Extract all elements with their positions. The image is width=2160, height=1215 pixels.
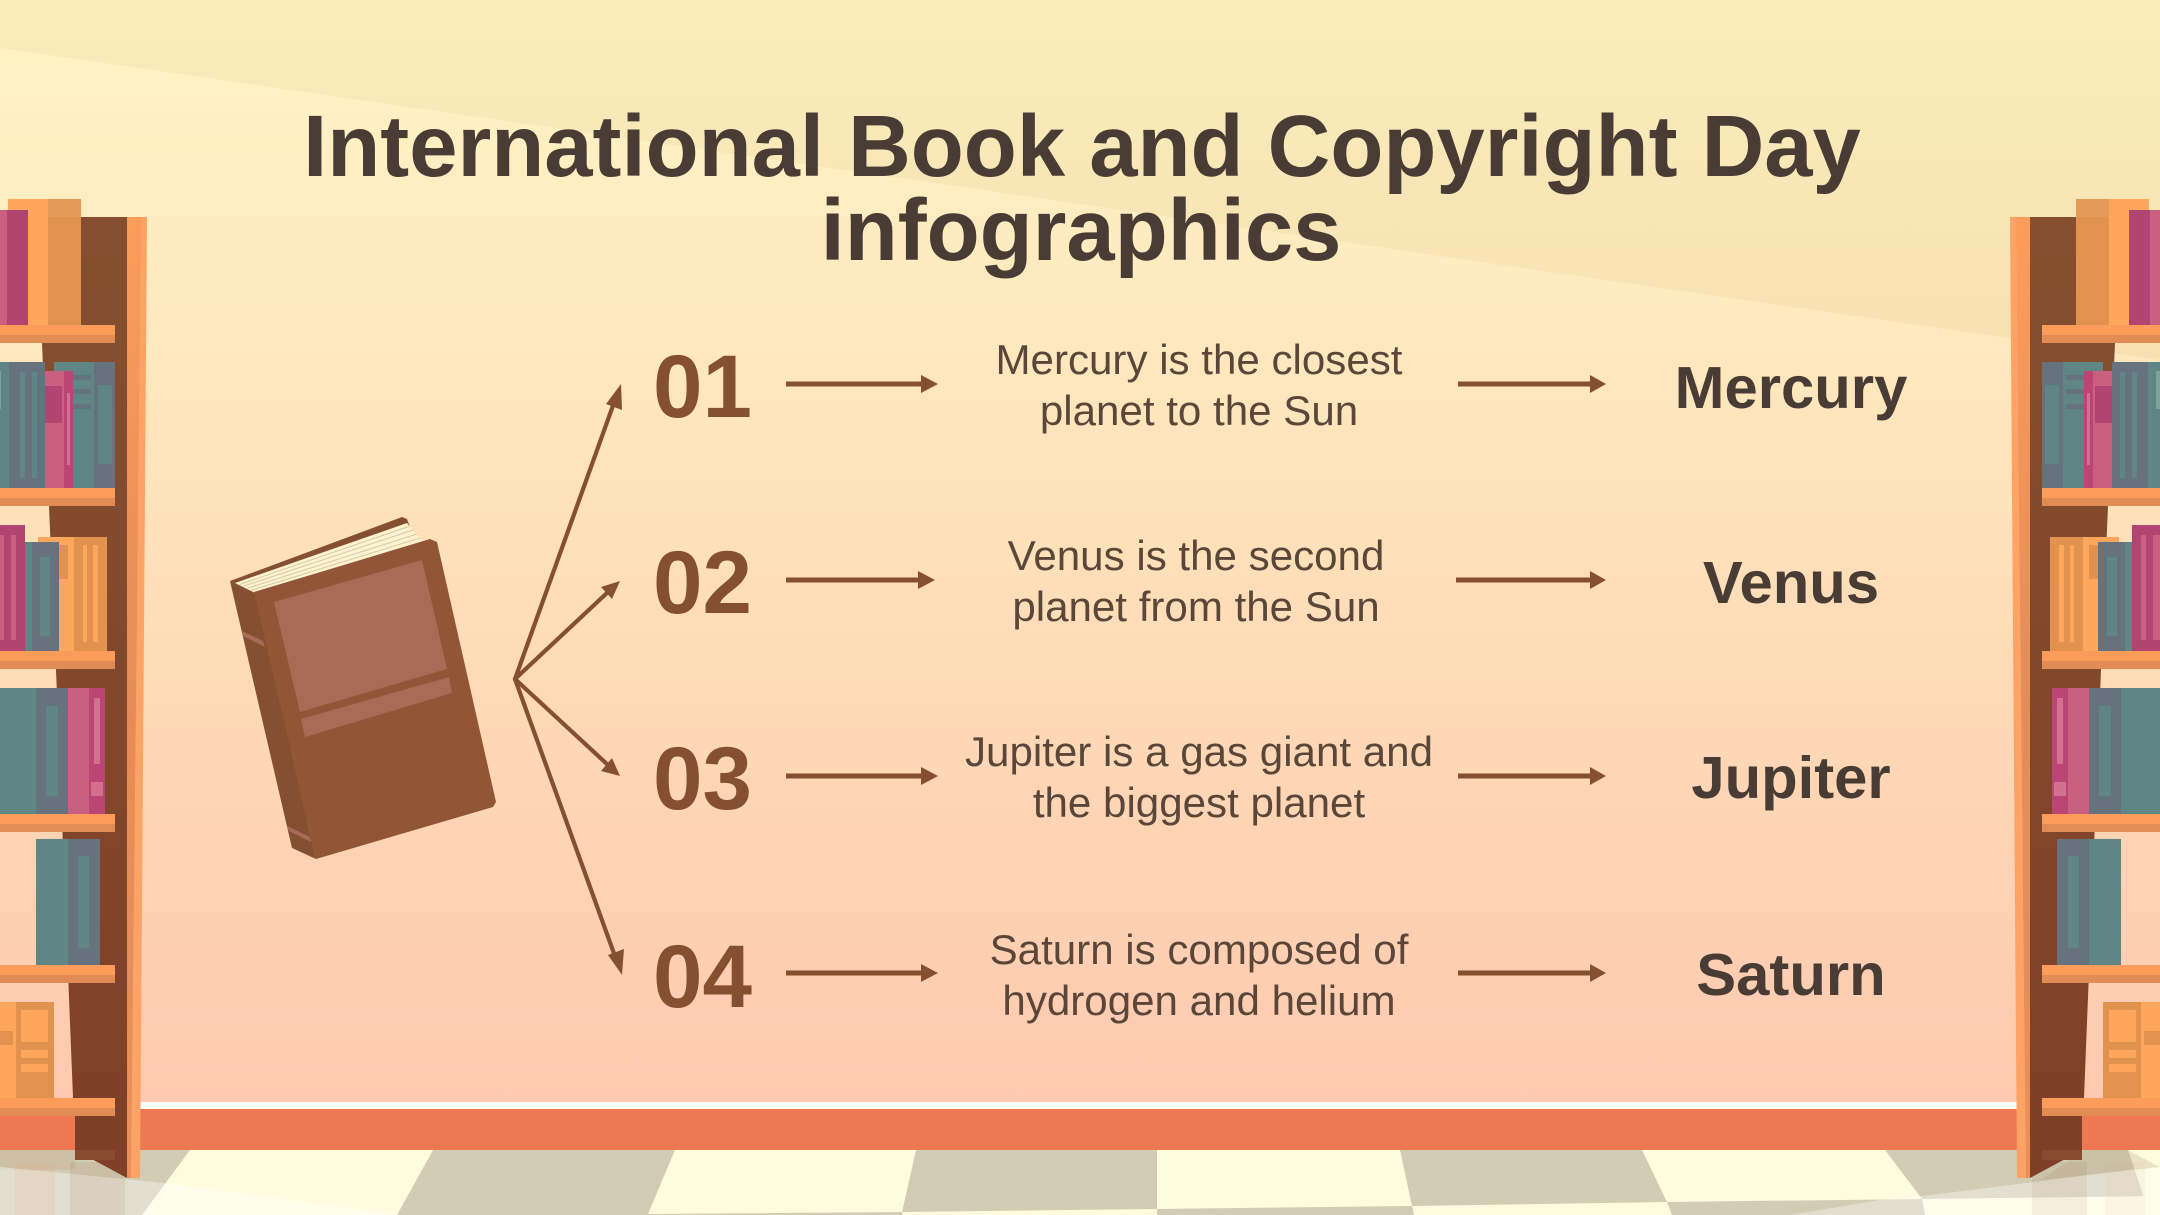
left bookcase	[0, 199, 147, 1178]
description: planet to the Sun	[1040, 387, 1358, 434]
description: planet from the Sun	[1012, 583, 1380, 630]
title	[303, 98, 1861, 279]
name: Venus	[1703, 549, 1879, 616]
number 01: 01	[653, 336, 752, 436]
title: infographics	[821, 182, 1341, 279]
arrow	[1458, 767, 1606, 785]
description	[965, 728, 1433, 826]
description	[1008, 532, 1384, 630]
row 02	[653, 532, 1879, 632]
checkered floor	[0, 1150, 2160, 1215]
arrow	[786, 375, 938, 393]
name: Saturn	[1696, 941, 1886, 1008]
arrow	[786, 571, 935, 589]
name: Mercury	[1675, 354, 1907, 421]
arrow	[1458, 964, 1606, 982]
description	[990, 926, 1409, 1024]
number 02: 02	[653, 532, 752, 632]
number 04: 04	[653, 926, 752, 1026]
arrow	[786, 767, 938, 785]
arrow	[1458, 375, 1606, 393]
row 01	[653, 336, 1907, 436]
icon: closed book	[230, 517, 496, 859]
fan arrows from book to items	[515, 384, 624, 975]
description	[995, 336, 1403, 434]
row 04	[653, 926, 1886, 1026]
description: hydrogen and helium	[1002, 977, 1396, 1024]
title: International Book and Copyright Day	[303, 98, 1861, 195]
description: Mercury is the closest	[995, 336, 1403, 383]
arrow	[1456, 571, 1606, 589]
skirting board	[0, 1102, 2160, 1150]
description: the biggest planet	[1033, 779, 1365, 826]
description: Jupiter is a gas giant and	[965, 728, 1433, 775]
number 03: 03	[653, 728, 752, 828]
right bookcase	[2010, 199, 2160, 1178]
arrow	[786, 964, 938, 982]
description: Venus is the second	[1008, 532, 1384, 579]
name: Jupiter	[1691, 744, 1891, 811]
row 03	[653, 728, 1891, 828]
description: Saturn is composed of	[990, 926, 1409, 973]
